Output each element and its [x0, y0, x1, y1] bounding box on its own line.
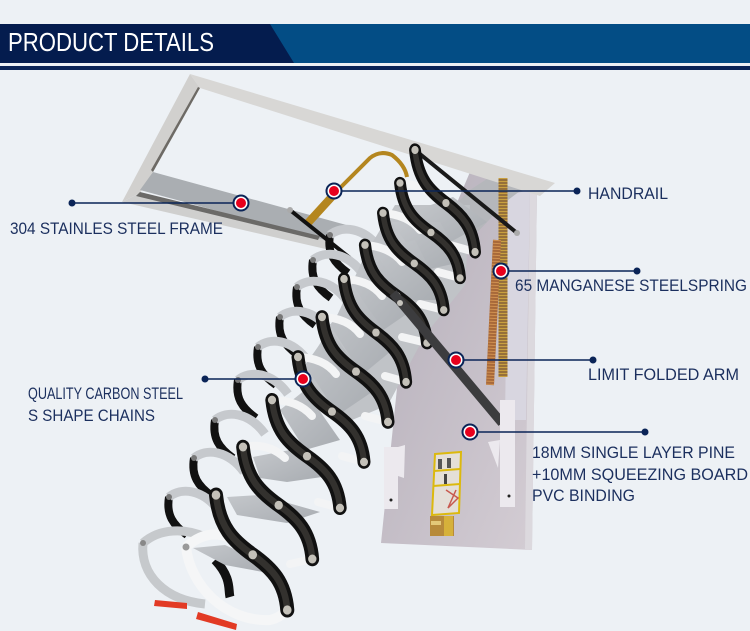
warning sticker [432, 452, 461, 515]
treads [193, 197, 487, 572]
red feet [154, 600, 237, 630]
callout: board material: 18MM SINGLE LAYER PINE [532, 443, 735, 462]
callout: 304 stainless steel frame [10, 196, 248, 238]
limit folded arm [393, 293, 502, 423]
front chains [239, 146, 479, 563]
callout: limit folded arm [448, 352, 739, 384]
ladder product illustration [122, 74, 555, 630]
black brace rods [287, 150, 520, 258]
callout: board material: PVC BINDING [532, 486, 635, 505]
wall brackets [384, 400, 515, 509]
bottom oval links [140, 531, 287, 620]
callout: carbon steel chains: S SHAPE CHAINS [28, 406, 155, 425]
header banner [0, 24, 750, 70]
back chains [166, 229, 380, 535]
callout: carbon steel chains [28, 372, 310, 425]
title: PRODUCT DETAILS [8, 27, 214, 57]
callout: limit folded arm: LIMIT FOLDED ARM [588, 365, 739, 384]
callout: carbon steel chains: QUALITY CARBON STEEL [28, 384, 183, 403]
white tread edges [243, 183, 475, 564]
stair body underlay [300, 205, 470, 425]
callout: board material [462, 424, 748, 505]
callout: 304 stainless steel frame: 304 STAINLES STEEL FRAME [10, 219, 223, 238]
callout: handrail [326, 184, 668, 203]
board [381, 172, 537, 550]
loft frame [122, 74, 555, 250]
springs [387, 178, 503, 385]
lower black link [215, 560, 230, 597]
last front chain [212, 490, 292, 615]
callout: 65 manganese steel spring [494, 264, 747, 295]
callout: handrail: HANDRAIL [588, 184, 668, 203]
grey upper panel behind spring [420, 175, 528, 285]
latch box [430, 516, 454, 536]
handrail [307, 153, 407, 224]
